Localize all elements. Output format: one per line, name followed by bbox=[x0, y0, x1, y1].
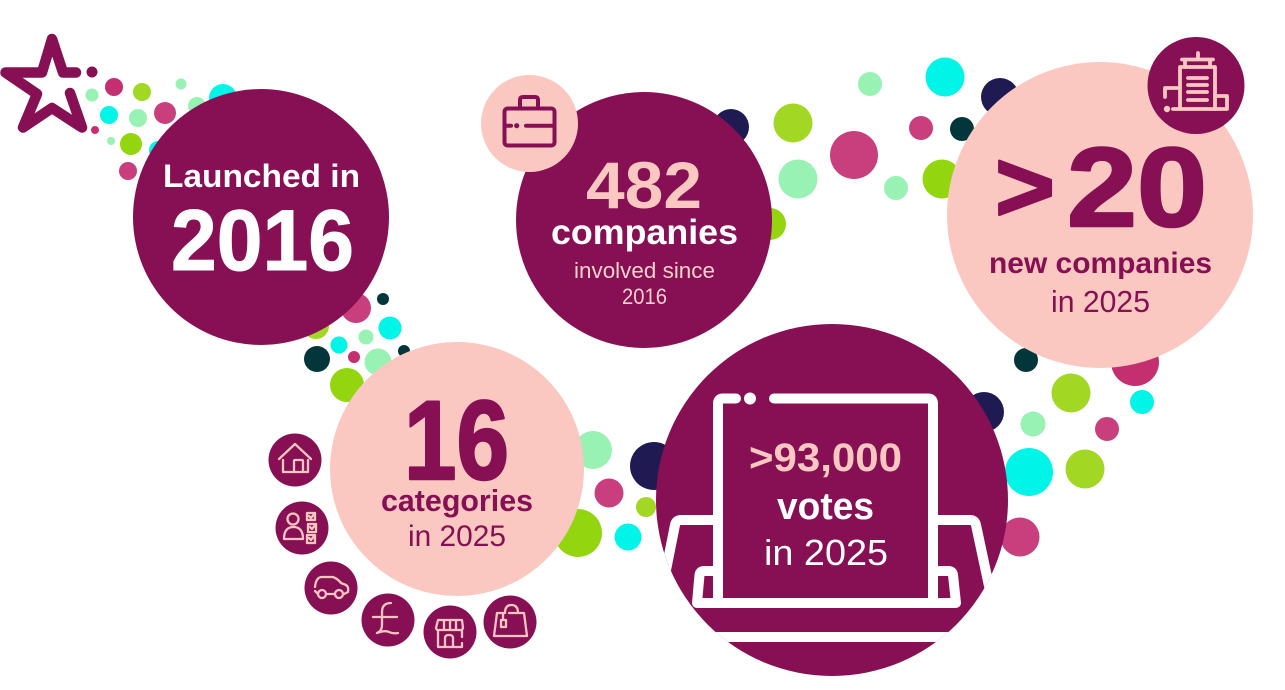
confetti dots: between categories and votes bbox=[554, 431, 678, 557]
icon: person with checklist bbox=[276, 502, 328, 554]
confetti dots: between companies and new companies bbox=[713, 58, 1019, 240]
panel: more than 20 new companies bbox=[947, 62, 1253, 368]
number: >20: > bbox=[995, 131, 1055, 243]
label: companies: companies bbox=[551, 213, 738, 252]
icon: car bbox=[304, 562, 358, 614]
text: involved since 2016: 2016 bbox=[622, 284, 667, 309]
panel: launched in 2016 bbox=[133, 89, 389, 345]
panel: 482 companies bbox=[516, 92, 772, 348]
panel: 93,000 votes bbox=[656, 324, 1008, 676]
text: in 2025: in 2025 bbox=[1051, 284, 1150, 319]
icon: office building bbox=[1148, 37, 1244, 134]
heading: launched in: Launched in bbox=[163, 158, 360, 194]
panel: 16 categories bbox=[330, 342, 584, 596]
number: 482: 482 bbox=[586, 148, 702, 222]
label: votes: votes bbox=[777, 486, 874, 528]
number: >20: 20 bbox=[1067, 125, 1207, 250]
number: 2016: 2016 bbox=[171, 193, 354, 289]
text: involved since 2016 bbox=[574, 258, 715, 309]
number: 16: 16 bbox=[404, 378, 509, 503]
icon: shooting star bbox=[6, 39, 82, 128]
icon: laptop outline bbox=[660, 398, 1000, 637]
confetti dots: between votes and new companies bbox=[964, 338, 1159, 556]
confetti dots: star trail bbox=[86, 66, 237, 180]
icon: briefcase bbox=[481, 75, 578, 172]
icon: shop front bbox=[424, 606, 476, 658]
label: categories: categories bbox=[381, 483, 533, 518]
number: >20 bbox=[995, 125, 1207, 250]
label: new companies: new companies bbox=[989, 247, 1212, 280]
icon: pound sign bbox=[362, 594, 414, 646]
icon: shopping bag bbox=[484, 596, 536, 648]
icon: laptop camera dot bbox=[744, 392, 756, 404]
icon: house bbox=[268, 434, 322, 486]
text: in 2025: in 2025 bbox=[408, 520, 506, 553]
text: in 2025: in 2025 bbox=[764, 532, 888, 573]
text: involved since 2016: involved since bbox=[574, 258, 715, 283]
confetti dots: between launched and categories bbox=[303, 293, 410, 402]
number: >93,000: >93,000 bbox=[749, 436, 902, 480]
